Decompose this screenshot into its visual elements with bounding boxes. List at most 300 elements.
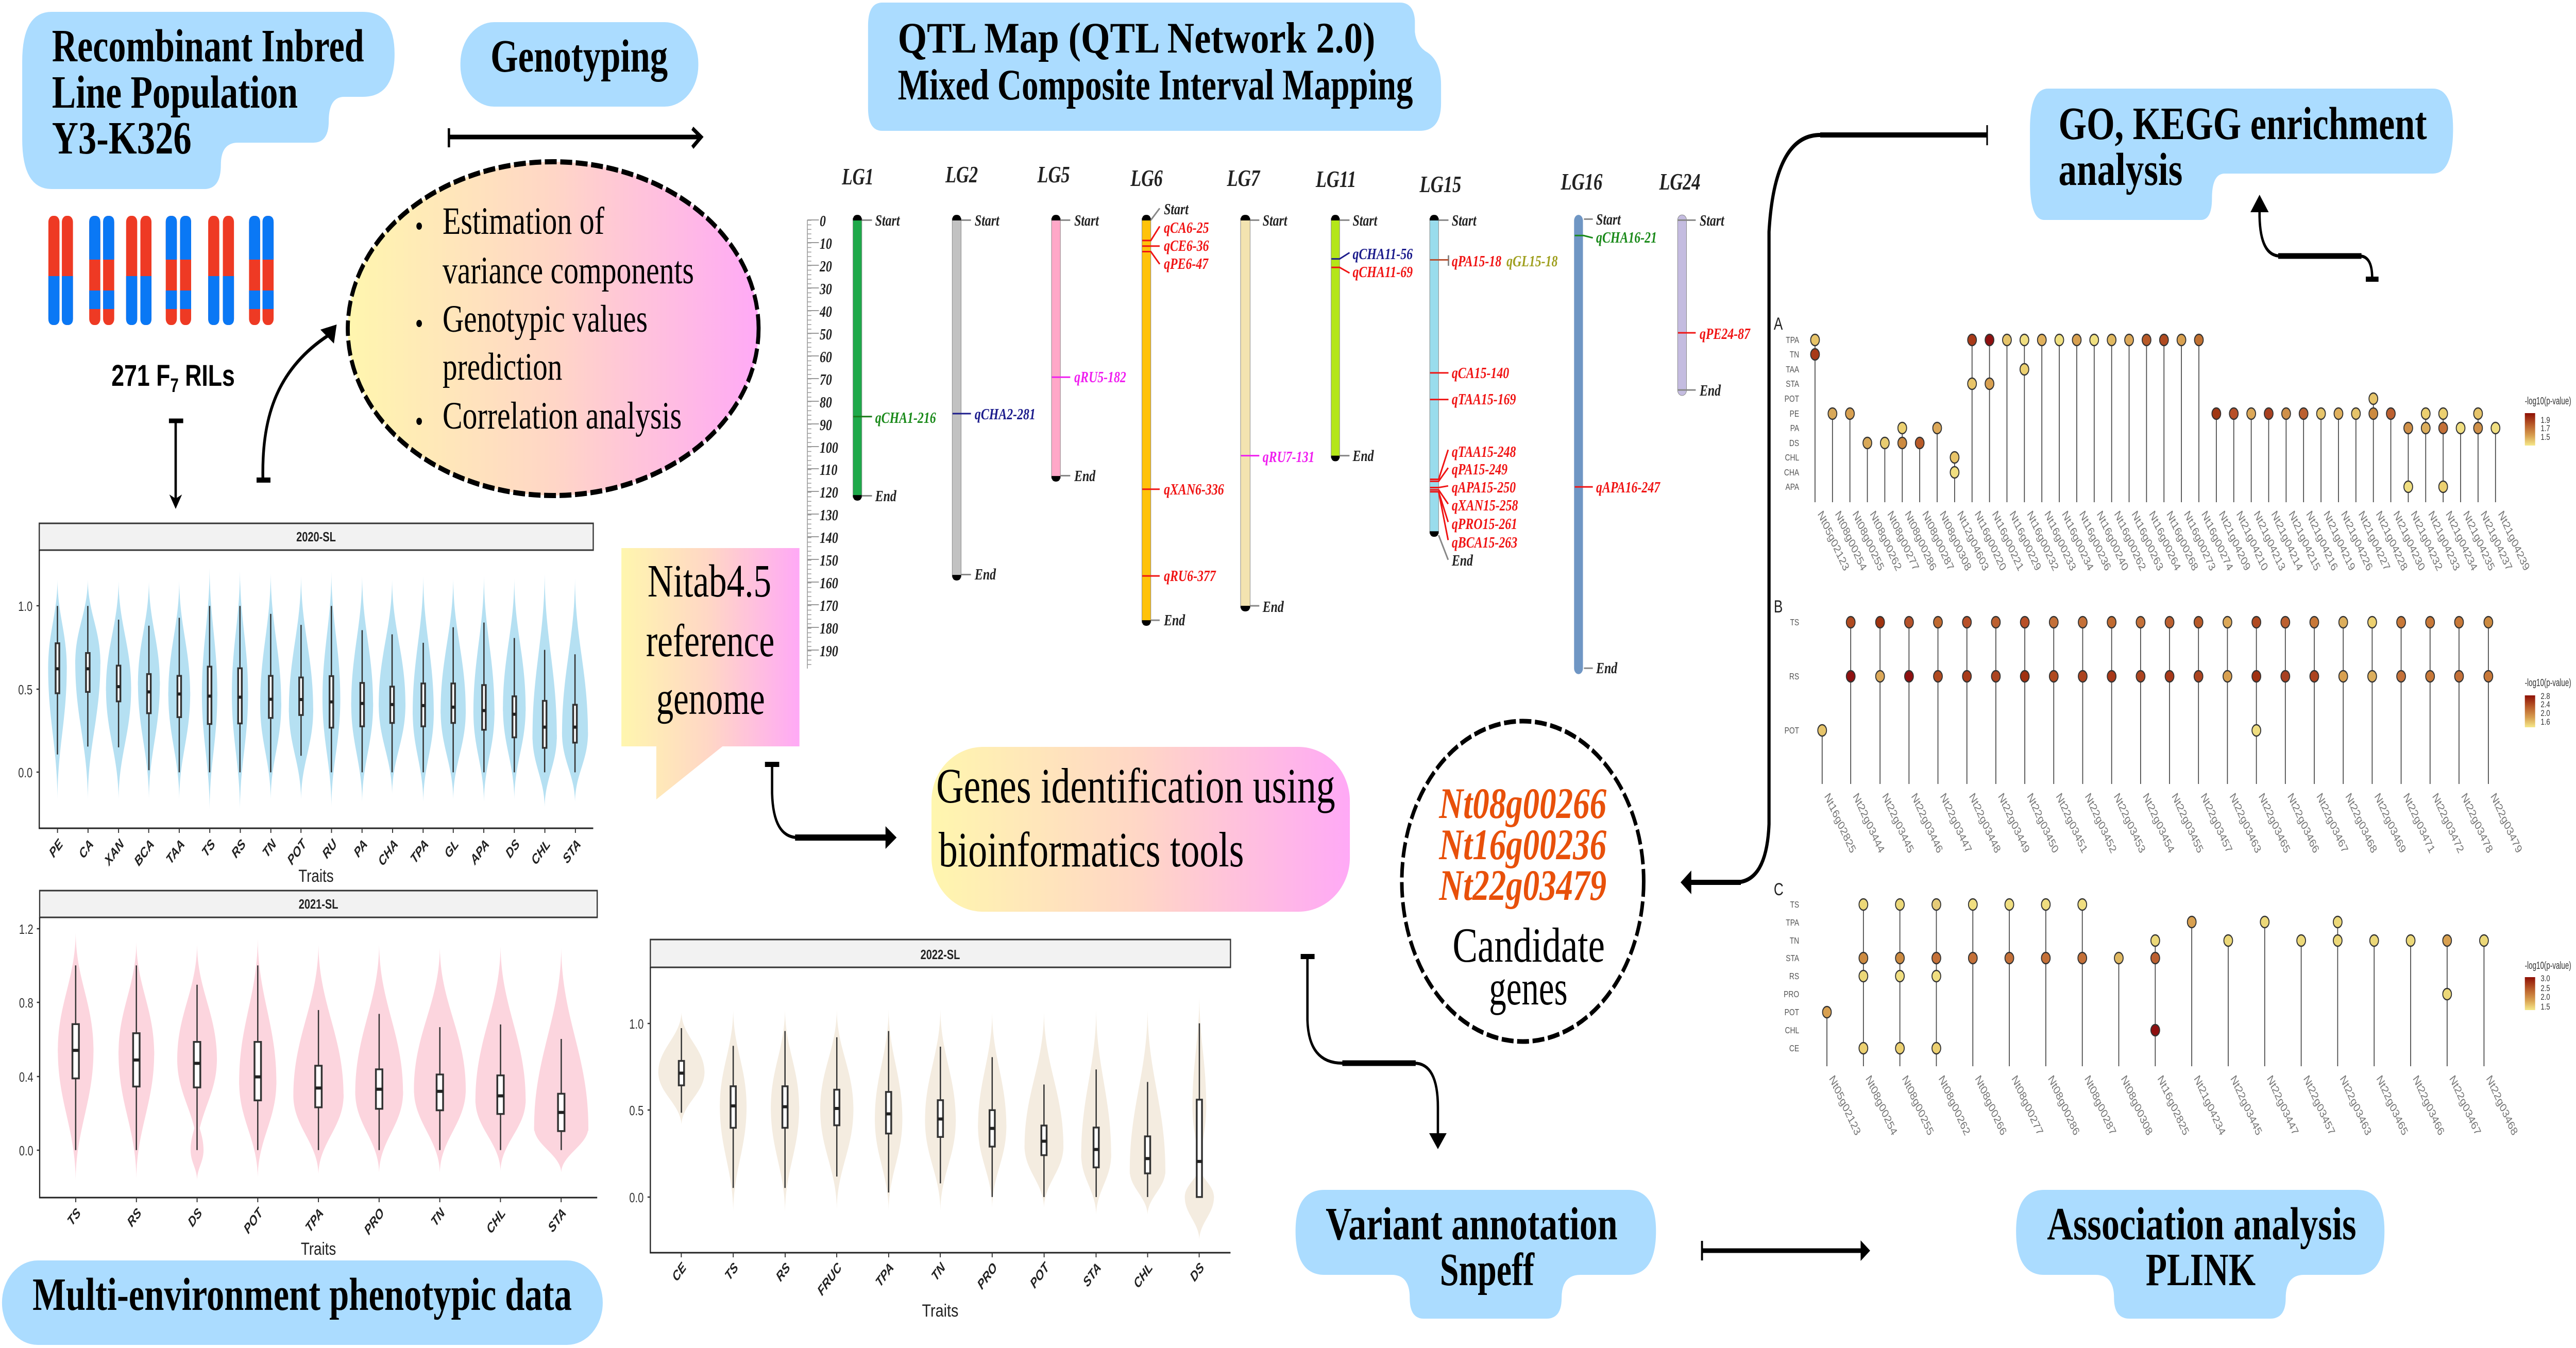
chart: linkage group LG15: LG15: [1419, 171, 1461, 197]
chart: linkage group LG6: LG6: [1130, 165, 1163, 191]
chart: violin plot 2020-SL: TN: [260, 836, 279, 861]
chart: lollipop association panel B: Nt22g03446: [1909, 791, 1945, 856]
panel: candidate genes: Nt22g03479: [1438, 861, 1606, 910]
chart: violin plot 2020-SL: STA: [561, 837, 583, 867]
chart: linkage group LG15: End: [1451, 551, 1473, 569]
chart: violin plot 2020-SL: 1.0: [18, 599, 32, 614]
chart: map distance ruler: 60: [820, 348, 832, 366]
chart: lollipop association panel C: Nt08g00262: [1937, 1073, 1972, 1138]
chart: map distance ruler: 140: [820, 528, 838, 547]
arrow: gene identification to variant annotation: [1301, 957, 1447, 1149]
chart: violin plot 2022-SL: 1.0: [629, 1016, 643, 1032]
chart: lollipop association panel C: 3.0: [2540, 974, 2550, 983]
chart: lollipop association panel A: Nt16g00229: [2007, 508, 2043, 573]
chart: lollipop association panel C: Nt08g00308: [2119, 1073, 2155, 1138]
panel: candidate genes: genes: [1489, 961, 1568, 1015]
chart: linkage group LG2: [945, 161, 1036, 583]
chart: lollipop association panel C: Nt16g02825: [2155, 1073, 2191, 1138]
chart: violin plot 2020-SL: BCA: [132, 837, 157, 869]
chart: lollipop association panel A: TAA: [1786, 364, 1799, 374]
chart: violin plot 2022-SL: CHL: [1131, 1260, 1155, 1291]
chart: lollipop association panel B: Nt22g03465: [2257, 791, 2292, 856]
chart: linkage group LG11: [1315, 166, 1413, 465]
chart: violin plot 2022-SL: TS: [723, 1260, 741, 1284]
chart: lollipop association panel A: Nt21g04216: [2304, 508, 2340, 573]
arrow: reference genome to gene identification: [765, 764, 896, 849]
label: 271 F7 RILs: RILs: [179, 359, 235, 392]
chart: lollipop association panel A: Nt21g04235: [2461, 508, 2497, 573]
chart: lollipop association panel C: Nt22g03465: [2374, 1073, 2410, 1138]
chart: violin plot 2020-SL: TS: [199, 837, 218, 860]
chart: lollipop association panel A: A: [1774, 315, 1783, 334]
chart: lollipop association panel A: TPA: [1786, 335, 1799, 345]
chart: violin plot 2021-SL: STA: [546, 1205, 569, 1236]
chart: lollipop association panel C: Nt08g00286: [2046, 1073, 2082, 1138]
chart: lollipop association panel C: Nt08g00277: [2009, 1073, 2045, 1138]
chart: violin plot 2020-SL: 0.5: [18, 682, 32, 697]
chart: linkage group LG15: [1419, 171, 1558, 569]
chart: lollipop association panel B: Nt22g03451: [2054, 791, 2090, 856]
chart: lollipop association panel C: Nt08g00254: [1863, 1073, 1900, 1138]
chart: violin plot 2021-SL: TN: [429, 1205, 448, 1230]
chart: linkage group LG1: qCHA1-216: [875, 408, 936, 426]
heading: Variant annotation Snpeff: Snpeff: [1440, 1244, 1535, 1295]
callout: Nitab4.5 reference genome: [621, 548, 800, 799]
panel: genotype analysis ellipse: Correlation analysis: [443, 395, 682, 437]
heading: GO, KEGG enrichment analysis: analysis: [2059, 144, 2182, 195]
chart: map distance ruler: 110: [820, 460, 838, 479]
chart: lollipop association panel B: Nt22g03468: [2343, 791, 2379, 856]
chart: violin plot 2021-SL: 0.8: [19, 995, 33, 1011]
panel: genotype analysis ellipse: variance components: [443, 249, 694, 292]
chart: linkage group LG24: qPE24-87: [1700, 325, 1751, 343]
chart: linkage group LG11: LG11: [1315, 166, 1356, 192]
panel: genes identification: bioinformatics tools: [939, 823, 1244, 877]
chart: violin plot 2021-SL: CHL: [484, 1205, 508, 1237]
chart: lollipop association panel A: Nt08g00287: [1920, 508, 1956, 573]
chart: violin plot 2021-SL: POT: [242, 1204, 266, 1237]
chart: violin plot 2022-SL: PRO: [975, 1260, 1000, 1292]
chart: lollipop association panel A: Nt21g04237: [2479, 508, 2514, 573]
chart: lollipop association panel B: Nt22g03447: [1938, 791, 1974, 856]
chart: linkage group LG6: qRU6-377: [1164, 567, 1216, 585]
chart: linkage group LG7: End: [1262, 598, 1284, 616]
chart: lollipop association panel A: Nt16g00220: [1973, 508, 2008, 573]
chart: linkage group LG6: qCA6-25: [1164, 218, 1209, 236]
chart: violin plot 2021-SL: [19, 891, 597, 1259]
chart: violin plot 2021-SL: RS: [125, 1205, 144, 1230]
chart: map distance ruler: 100: [820, 438, 838, 456]
chart: linkage group LG7: Start: [1263, 211, 1288, 229]
chart: linkage group LG6: qCE6-36: [1164, 236, 1209, 254]
chart: lollipop association panel A: Nt05g02123: [1816, 508, 1851, 573]
chart: linkage group LG11: qCHA11-69: [1352, 263, 1413, 281]
chart: violin plot 2020-SL: CHA: [376, 837, 400, 869]
chart: map distance ruler: 90: [820, 416, 832, 434]
chart: lollipop association panel B: 2.0: [2540, 708, 2550, 718]
chart: map distance ruler: 120: [820, 483, 838, 501]
chart: violin plot 2020-SL: TAA: [164, 837, 187, 867]
chart: lollipop association panel A: Nt21g04228: [2374, 508, 2410, 573]
chart: linkage group LG5: LG5: [1037, 161, 1070, 187]
chart: violin plot 2022-SL: STA: [1081, 1260, 1104, 1290]
arrow: variant annotation to association analysis: [1702, 1240, 1870, 1261]
chart: lollipop association panel C: 1.5: [2540, 1002, 2550, 1012]
chart: lollipop association panel A: Nt16g00233: [2042, 508, 2078, 573]
chart: linkage group LG15: qTAA15-248: [1452, 442, 1516, 460]
chart: violin plot 2022-SL: Traits: [922, 1302, 958, 1321]
chart: lollipop association panel A: Nt16g00263: [2129, 508, 2165, 573]
chart: violin plot 2020-SL: CHL: [529, 837, 553, 868]
chart: lollipop association panel A: Nt16g00268: [2164, 508, 2200, 573]
chart: lollipop association panel C: PRO: [1784, 989, 1799, 999]
chart: map distance ruler: 50: [820, 325, 832, 343]
chart: linkage group LG7: LG7: [1227, 165, 1261, 191]
chart: lollipop association panel B: B: [1774, 598, 1783, 617]
chart: lollipop association panel C: Nt22g03457: [2301, 1073, 2337, 1138]
callout: Nitab4.5 reference genome: Nitab4.5: [648, 555, 771, 607]
panel: genes identification: [931, 747, 1350, 912]
chart: lollipop association panel B: Nt22g03457: [2198, 791, 2234, 856]
chart: violin plot 2022-SL: 0.0: [629, 1190, 643, 1205]
chart: linkage group LG2: qCHA2-281: [975, 405, 1036, 423]
chart: lollipop association panel A: Nt16g00274: [2199, 508, 2235, 573]
chart: violin plot 2022-SL: [629, 940, 1230, 1321]
chart: lollipop association panel B: TS: [1790, 617, 1799, 627]
chart: linkage group LG1: Start: [875, 211, 901, 229]
chart: lollipop association panel A: POT: [1785, 394, 1799, 404]
chart: linkage group LG15: qCA15-140: [1452, 364, 1509, 382]
chart: lollipop association panel A: Nt21g04226: [2339, 508, 2375, 573]
heading: Association analysis PLINK: [2016, 1190, 2384, 1319]
chart: linkage group LG5: qRU5-182: [1074, 368, 1126, 386]
heading: Association analysis PLINK: Association analysis: [2047, 1198, 2357, 1250]
chart: violin plot 2020-SL: PE: [47, 836, 65, 861]
chart: lollipop association panel A: Nt16g00236: [2077, 508, 2113, 573]
chart: lollipop association panel A: Nt21g04230: [2391, 508, 2427, 573]
chart: lollipop association panel A: Nt08g00255: [1851, 508, 1886, 573]
chart: lollipop association panel C: TPA: [1786, 917, 1799, 928]
heading: Association analysis PLINK: PLINK: [2146, 1244, 2256, 1295]
chart: linkage group LG5: Start: [1074, 211, 1099, 229]
chart: lollipop association panel C: C: [1774, 880, 1784, 899]
chart: lollipop association panel B: Nt22g03479: [2488, 791, 2524, 856]
chart: map distance ruler: 40: [819, 302, 832, 320]
chart: lollipop association panel B: Nt22g03444: [1851, 791, 1887, 856]
chart: linkage group LG1: End: [875, 487, 897, 505]
chart: linkage group LG16: qAPA16-247: [1596, 478, 1660, 496]
chart: lollipop association panel C: Nt22g03447: [2265, 1073, 2301, 1138]
chart: linkage group LG15: qXAN15-258: [1452, 496, 1518, 514]
chart: lollipop association panel C: CHL: [1785, 1025, 1799, 1035]
chart: lollipop association panel C: Nt21g04234: [2192, 1073, 2228, 1138]
chart: lollipop association panel C: [1774, 880, 2571, 1138]
heading: Multi-environment phenotypic data: [2, 1260, 603, 1345]
chart: linkage group LG24: Start: [1700, 211, 1725, 229]
heading: Variant annotation Snpeff: [1296, 1190, 1656, 1319]
chart: linkage group LG16: qCHA16-21: [1596, 228, 1657, 246]
chart: lollipop association panel C: RS: [1789, 971, 1799, 981]
chart: lollipop association panel B: Nt22g03452: [2083, 791, 2119, 856]
chart: violin plot 2020-SL: Traits: [298, 867, 334, 886]
heading: Multi-environment phenotypic data: Multi-environment phenotypic data: [32, 1269, 572, 1320]
chart: lollipop association panel A: 1.7: [2540, 423, 2550, 433]
chart: lollipop association panel A: Nt08g00308: [1938, 508, 1973, 573]
chart: violin plot 2020-SL: TPA: [408, 837, 431, 867]
chart: linkage group LG15: qAPA15-250: [1452, 478, 1516, 496]
chart: linkage group LG11: qCHA11-56: [1352, 245, 1413, 263]
chart: linkage group LG6: End: [1163, 611, 1185, 629]
icon: recombinant chromosome pairs: [48, 216, 274, 325]
chart: lollipop association panel C: Nt22g03468: [2484, 1073, 2520, 1138]
chart: lollipop association panel C: STA: [1786, 953, 1799, 963]
chart: lollipop association panel B: [1774, 598, 2571, 856]
arrow: Genotyping to QTL map: [449, 128, 701, 147]
chart: violin plot 2021-SL: DS: [185, 1205, 205, 1230]
chart: violin plot 2020-SL: 0.0: [18, 765, 32, 780]
chart: lollipop association panel A: APA: [1785, 482, 1799, 492]
chart: lollipop association panel A: Nt21g04239: [2496, 508, 2532, 573]
chart: lollipop association panel A: Nt12g04603: [1955, 508, 1991, 573]
chart: lollipop association panel A: Nt21g04232: [2409, 508, 2445, 573]
chart: lollipop association panel B: 1.6: [2540, 717, 2550, 727]
chart: lollipop association panel C: Nt22g03467: [2447, 1073, 2483, 1138]
chart: lollipop association panel B: Nt22g03478: [2459, 791, 2495, 856]
panel: candidate genes: Nt08g00266: [1438, 779, 1606, 828]
chart: lollipop association panel A: CHL: [1785, 452, 1799, 463]
chart: lollipop association panel C: Nt22g03445: [2228, 1073, 2264, 1138]
chart: lollipop association panel B: Nt22g03472: [2430, 791, 2466, 856]
chart: lollipop association panel B: 2.8: [2540, 691, 2550, 701]
heading: Recombinant Inbred Line Population: Line Population: [52, 66, 298, 118]
arrow: enrichment plot up to GO KEGG: [2250, 195, 2379, 279]
chart: lollipop association panel C: Nt22g03463: [2338, 1073, 2374, 1138]
chart: linkage group LG15: qTAA15-169: [1452, 390, 1516, 408]
chart: lollipop association panel A: Nt21g04214: [2269, 508, 2305, 573]
chart: lollipop association panel B: POT: [1785, 725, 1799, 736]
chart: lollipop association panel B: Nt22g03454: [2141, 791, 2177, 856]
chart: linkage group LG11: Start: [1352, 211, 1378, 229]
chart: map distance ruler: [807, 212, 838, 669]
chart: lollipop association panel C: Nt08g00255: [1900, 1073, 1936, 1138]
chart: linkage group LG16: LG16: [1561, 168, 1603, 195]
chart: map distance ruler: 80: [820, 393, 832, 411]
chart: lollipop association panel A: Nt21g04209: [2217, 508, 2252, 573]
chart: lollipop association panel A: Nt16g00221: [1990, 508, 2026, 573]
chart: lollipop association panel A: Nt21g04233: [2426, 508, 2462, 573]
chart: lollipop association panel B: Nt22g03471: [2401, 791, 2437, 856]
chart: linkage group LG16: [1561, 168, 1660, 677]
heading: QTL Map: [868, 3, 1441, 131]
chart: lollipop association panel A: Nt16g00262: [2112, 508, 2148, 573]
chart: map distance ruler: 20: [819, 257, 832, 275]
chart: violin plot 2022-SL: TN: [929, 1259, 948, 1284]
chart: linkage group LG7: [1227, 165, 1314, 616]
panel: candidate genes: Nt16g00236: [1438, 821, 1606, 869]
chart: lollipop association panel A: 1.9: [2540, 415, 2550, 425]
chart: violin plot 2021-SL: 1.2: [19, 922, 33, 937]
chart: linkage group LG6: qXAN6-336: [1164, 480, 1224, 498]
chart: linkage group LG16: End: [1596, 659, 1618, 677]
chart: lollipop association panel A: Nt21g04234: [2444, 508, 2480, 573]
chart: linkage group LG2: Start: [975, 211, 1000, 229]
chart: linkage group LG24: LG24: [1659, 168, 1700, 195]
chart: linkage group LG11: End: [1352, 447, 1375, 465]
chart: lollipop association panel C: TN: [1790, 935, 1799, 946]
label: 271 F7 RILs: 7: [170, 374, 179, 397]
chart: lollipop association panel A: Nt21g04213: [2252, 508, 2287, 573]
chart: linkage group LG2: LG2: [945, 161, 978, 187]
chart: linkage group LG24: [1659, 168, 1751, 399]
chart: lollipop association panel A: Nt16g00234: [2060, 508, 2096, 573]
chart: lollipop association panel A: Nt21g04219: [2321, 508, 2358, 573]
chart: map distance ruler: 0: [820, 212, 826, 230]
chart: lollipop association panel C: TS: [1790, 899, 1799, 910]
chart: lollipop association panel C: 2.0: [2540, 992, 2550, 1002]
chart: violin plot 2020-SL: APA: [468, 837, 492, 868]
chart: violin plot 2020-SL: XAN: [101, 836, 127, 869]
chart: lollipop association panel A: Nt08g00286: [1903, 508, 1939, 573]
chart: lollipop association panel B: RS: [1789, 671, 1799, 681]
heading: Genotyping: [461, 22, 698, 107]
chart: lollipop association panel B: Nt22g03467: [2314, 791, 2350, 856]
heading: Recombinant Inbred Line Population: [22, 12, 395, 189]
panel: genotype analysis ellipse: Estimation of: [443, 200, 605, 243]
heading: GO, KEGG enrichment analysis: GO, KEGG enrichment: [2059, 98, 2427, 149]
chart: linkage group LG1: [841, 163, 936, 505]
chart: lollipop association panel B: Nt22g03463: [2228, 791, 2263, 856]
chart: lollipop association panel B: Nt22g03455: [2170, 791, 2206, 856]
chart: map distance ruler: 10: [820, 234, 832, 252]
chart: linkage group LG2: End: [974, 565, 996, 583]
chart: map distance ruler: 190: [820, 642, 838, 660]
panel: genotype analysis ellipse: Genotypic values: [443, 298, 648, 340]
arrow: RILs down to phenotypes: [169, 421, 183, 509]
chart: violin plot 2021-SL: TS: [65, 1205, 83, 1229]
chart: violin plot 2022-SL: TPA: [873, 1260, 896, 1290]
chart: lollipop association panel A: TN: [1790, 349, 1799, 360]
arrow: curved up to genotype analysis: [257, 325, 336, 480]
chart: lollipop association panel C: POT: [1785, 1007, 1799, 1017]
chart: lollipop association panel C: Nt08g00266: [1973, 1073, 2009, 1138]
chart: lollipop association panel C: Nt05g02123: [1827, 1073, 1863, 1138]
chart: lollipop association panel A: Nt16g00232: [2025, 508, 2061, 573]
chart: lollipop association panel B: Nt22g03449: [1996, 791, 2032, 856]
chart: lollipop association panel A: PE: [1790, 408, 1799, 419]
panel: candidate genes: [1402, 721, 1643, 1042]
chart: lollipop association panel C: CE: [1789, 1043, 1799, 1053]
chart: violin plot 2020-SL: RS: [229, 837, 248, 861]
chart: linkage group LG7: qRU7-131: [1263, 448, 1314, 466]
heading: Genotyping: Genotyping: [490, 30, 668, 82]
chart: linkage group LG6: qPE6-47: [1164, 254, 1209, 272]
chart: linkage group LG6: [1130, 165, 1224, 629]
chart: lollipop association panel B: Nt22g03453: [2112, 791, 2147, 856]
chart: linkage group LG16: Start: [1596, 210, 1621, 228]
chart: map distance ruler: 130: [820, 506, 838, 524]
chart: lollipop association panel A: [1774, 315, 2571, 573]
chart: lollipop association panel C: Nt08g00287: [2082, 1073, 2118, 1138]
chart: violin plot 2021-SL: Traits: [301, 1240, 336, 1259]
chart: linkage group LG15: Start: [1452, 211, 1477, 229]
chart: violin plot 2022-SL: 0.5: [629, 1103, 643, 1118]
panel: genotype analysis ellipse: [348, 162, 758, 496]
chart: lollipop association panel B: Nt22g03450: [2025, 791, 2061, 856]
chart: violin plot 2020-SL: 2020-SL: [296, 529, 336, 544]
chart: violin plot 2022-SL: FRUC: [815, 1259, 844, 1299]
chart: map distance ruler: 160: [820, 574, 838, 592]
chart: lollipop association panel A: Nt08g00277: [1885, 508, 1921, 573]
chart: violin plot 2020-SL: PA: [351, 837, 370, 861]
chart: map distance ruler: 70: [820, 370, 832, 388]
chart: violin plot 2021-SL: 2021-SL: [299, 896, 338, 912]
chart: linkage group LG15: qPRO15-261: [1452, 515, 1517, 533]
chart: linkage group LG15: qGL15-18: [1506, 252, 1558, 270]
chart: lollipop association panel B: Nt22g03466: [2285, 791, 2321, 856]
chart: lollipop association panel A: Nt08g00262: [1868, 508, 1904, 573]
chart: violin plot 2021-SL: PRO: [362, 1205, 387, 1238]
chart: violin plot 2021-SL: TPA: [303, 1205, 326, 1236]
chart: lollipop association panel A: STA: [1786, 379, 1799, 389]
chart: lollipop association panel A: DS: [1789, 438, 1799, 448]
chart: lollipop association panel A: Nt21g04227: [2357, 508, 2392, 573]
heading: GO, KEGG enrichment analysis: [2030, 89, 2453, 220]
chart: violin plot 2020-SL: DS: [503, 837, 522, 861]
panel: candidate genes: Candidate: [1452, 918, 1605, 972]
chart: violin plot 2022-SL: DS: [1188, 1260, 1207, 1285]
chart: violin plot 2022-SL: 2022-SL: [921, 947, 960, 962]
chart: lollipop association panel B: Nt22g03469: [2372, 791, 2408, 856]
label: 271 F7 RILs: 271 F: [111, 359, 170, 392]
chart: map distance ruler: 180: [820, 619, 838, 637]
chart: violin plot 2020-SL: GL: [442, 837, 461, 861]
chart: map distance ruler: 150: [820, 551, 838, 569]
heading: QTL Map: QTL Map (QTL Network 2.0): [898, 14, 1375, 62]
heading: Recombinant Inbred Line Population: Recombinant Inbred: [52, 20, 364, 72]
heading: Recombinant Inbred Line Population: Y3-K326: [52, 112, 192, 164]
panel: genotype analysis ellipse: prediction: [443, 346, 562, 388]
chart: lollipop association panel A: Nt16g00240: [2095, 508, 2130, 573]
heading: Variant annotation Snpeff: Variant annotation: [1326, 1198, 1618, 1250]
heading: QTL Map: Mixed Composite Interval Mapping: [898, 61, 1413, 109]
chart: map distance ruler: 30: [819, 280, 832, 298]
chart: violin plot 2020-SL: CA: [77, 837, 96, 862]
chart: linkage group LG1: LG1: [841, 163, 874, 190]
chart: violin plot 2022-SL: POT: [1028, 1259, 1053, 1291]
chart: lollipop association panel A: Nt21g04210: [2234, 508, 2270, 573]
arrow: GO KEGG to candidate genes: [1681, 125, 1987, 894]
chart: lollipop association panel C: Nt22g03466: [2411, 1073, 2447, 1138]
chart: lollipop association panel A: PA: [1790, 423, 1799, 433]
chart: linkage group LG6: Start: [1164, 200, 1189, 218]
chart: lollipop association panel C: 2.5: [2540, 983, 2550, 993]
chart: lollipop association panel A: Nt16g00273: [2182, 508, 2218, 573]
chart: lollipop association panel B: Nt22g03448: [1967, 791, 2003, 856]
chart: linkage group LG5: End: [1074, 467, 1096, 485]
chart: lollipop association panel A: CHA: [1784, 467, 1799, 477]
chart: linkage group LG15: qBCA15-263: [1452, 533, 1517, 551]
chart: map distance ruler: 170: [820, 596, 838, 615]
chart: lollipop association panel B: Nt22g03445: [1880, 791, 1916, 856]
panel: genes identification: Genes identification using: [936, 759, 1335, 813]
chart: lollipop association panel B: Nt16g02825: [1822, 791, 1858, 856]
callout: Nitab4.5 reference genome: genome: [656, 673, 765, 724]
chart: lollipop association panel B: 2.4: [2540, 699, 2550, 709]
chart: violin plot 2020-SL: RU: [320, 836, 340, 862]
chart: linkage group LG15: qPA15-18: [1452, 252, 1501, 270]
chart: lollipop association panel A: 1.5: [2540, 432, 2550, 442]
chart: linkage group LG5: [1037, 161, 1126, 485]
